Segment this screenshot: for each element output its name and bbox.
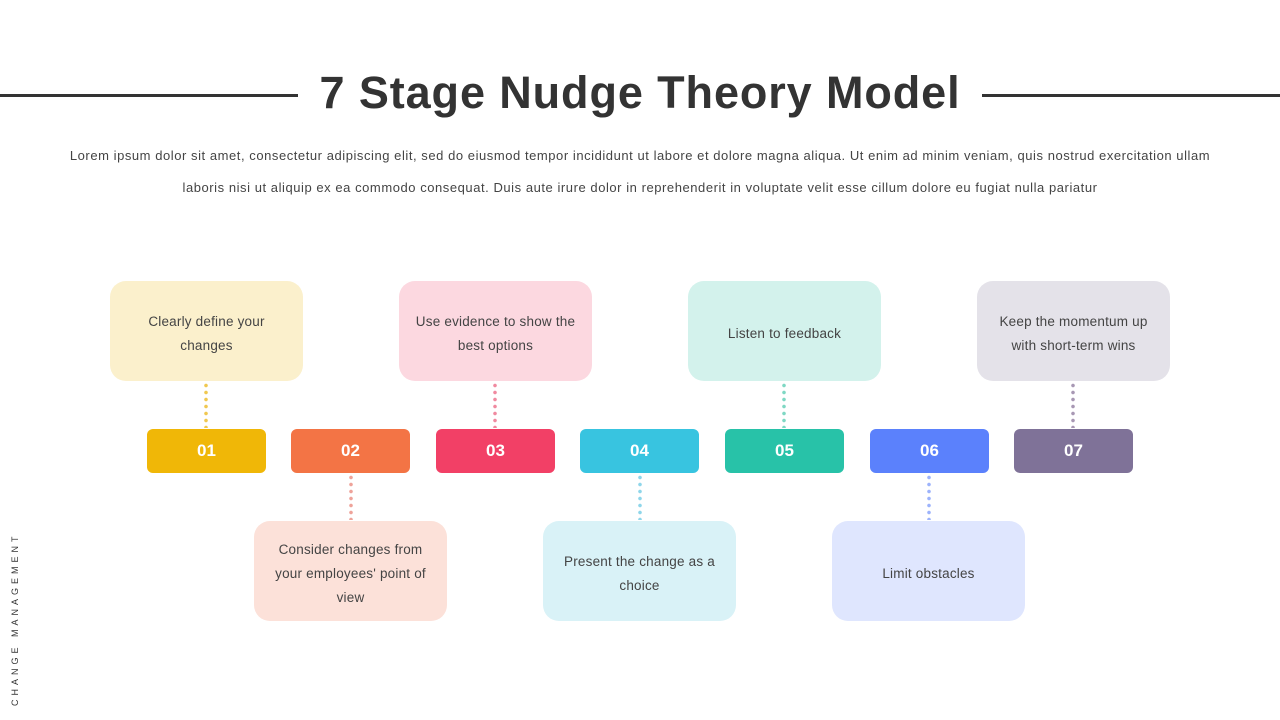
step 07 bbox=[1014, 429, 1133, 473]
connector 2 bbox=[348, 474, 354, 520]
step 05 bbox=[725, 429, 844, 473]
step 02: 02 bbox=[341, 441, 360, 460]
step 04 bbox=[580, 429, 699, 473]
card 2: Consider changes from your employees' point of view bbox=[275, 542, 426, 605]
card 4 bbox=[543, 521, 736, 621]
card 7 bbox=[977, 281, 1170, 381]
description text: laboris nisi ut aliquip ex ea commodo consequat. Duis aute irure dolor in reprehenderit in voluptate velit esse cillum dolore eu fugiat nulla pariatur bbox=[183, 180, 1097, 195]
card 4: Present the change as a choice bbox=[564, 554, 715, 593]
card 1: Clearly define your changes bbox=[148, 314, 265, 353]
card 6: Limit obstacles bbox=[882, 566, 975, 581]
step 01: 01 bbox=[197, 441, 216, 460]
connector 3 bbox=[492, 382, 498, 428]
card 1 bbox=[110, 281, 303, 381]
step 06: 06 bbox=[920, 441, 939, 460]
step 07: 07 bbox=[1064, 441, 1083, 460]
step 04: 04 bbox=[630, 441, 649, 460]
vertical label: CHANGE MANAGEMENT bbox=[10, 532, 20, 706]
connector 7 bbox=[1070, 382, 1076, 428]
card 5 bbox=[688, 281, 881, 381]
connector 5 bbox=[781, 382, 787, 428]
step 05: 05 bbox=[775, 441, 794, 460]
card 5: Listen to feedback bbox=[728, 326, 841, 341]
connector 1 bbox=[203, 382, 209, 428]
card 6 bbox=[832, 521, 1025, 621]
step 03 bbox=[436, 429, 555, 473]
title bbox=[0, 67, 1280, 118]
step 03: 03 bbox=[486, 441, 505, 460]
step 02 bbox=[291, 429, 410, 473]
connector 4 bbox=[637, 474, 643, 520]
description text bbox=[70, 148, 1210, 195]
card 3 bbox=[399, 281, 592, 381]
card 2 bbox=[254, 521, 447, 621]
description text: Lorem ipsum dolor sit amet, consectetur adipiscing elit, sed do eiusmod tempor incididunt ut labore et dolore magna aliqua. Ut enim ad minim veniam, quis nostrud exercitation ullam bbox=[70, 148, 1210, 163]
card 7: Keep the momentum up with short-term wins bbox=[999, 314, 1148, 353]
card 3: Use evidence to show the best options bbox=[416, 314, 575, 353]
connector 6 bbox=[926, 474, 932, 520]
step 01 bbox=[147, 429, 266, 473]
title: 7 Stage Nudge Theory Model bbox=[320, 67, 960, 118]
step 06 bbox=[870, 429, 989, 473]
